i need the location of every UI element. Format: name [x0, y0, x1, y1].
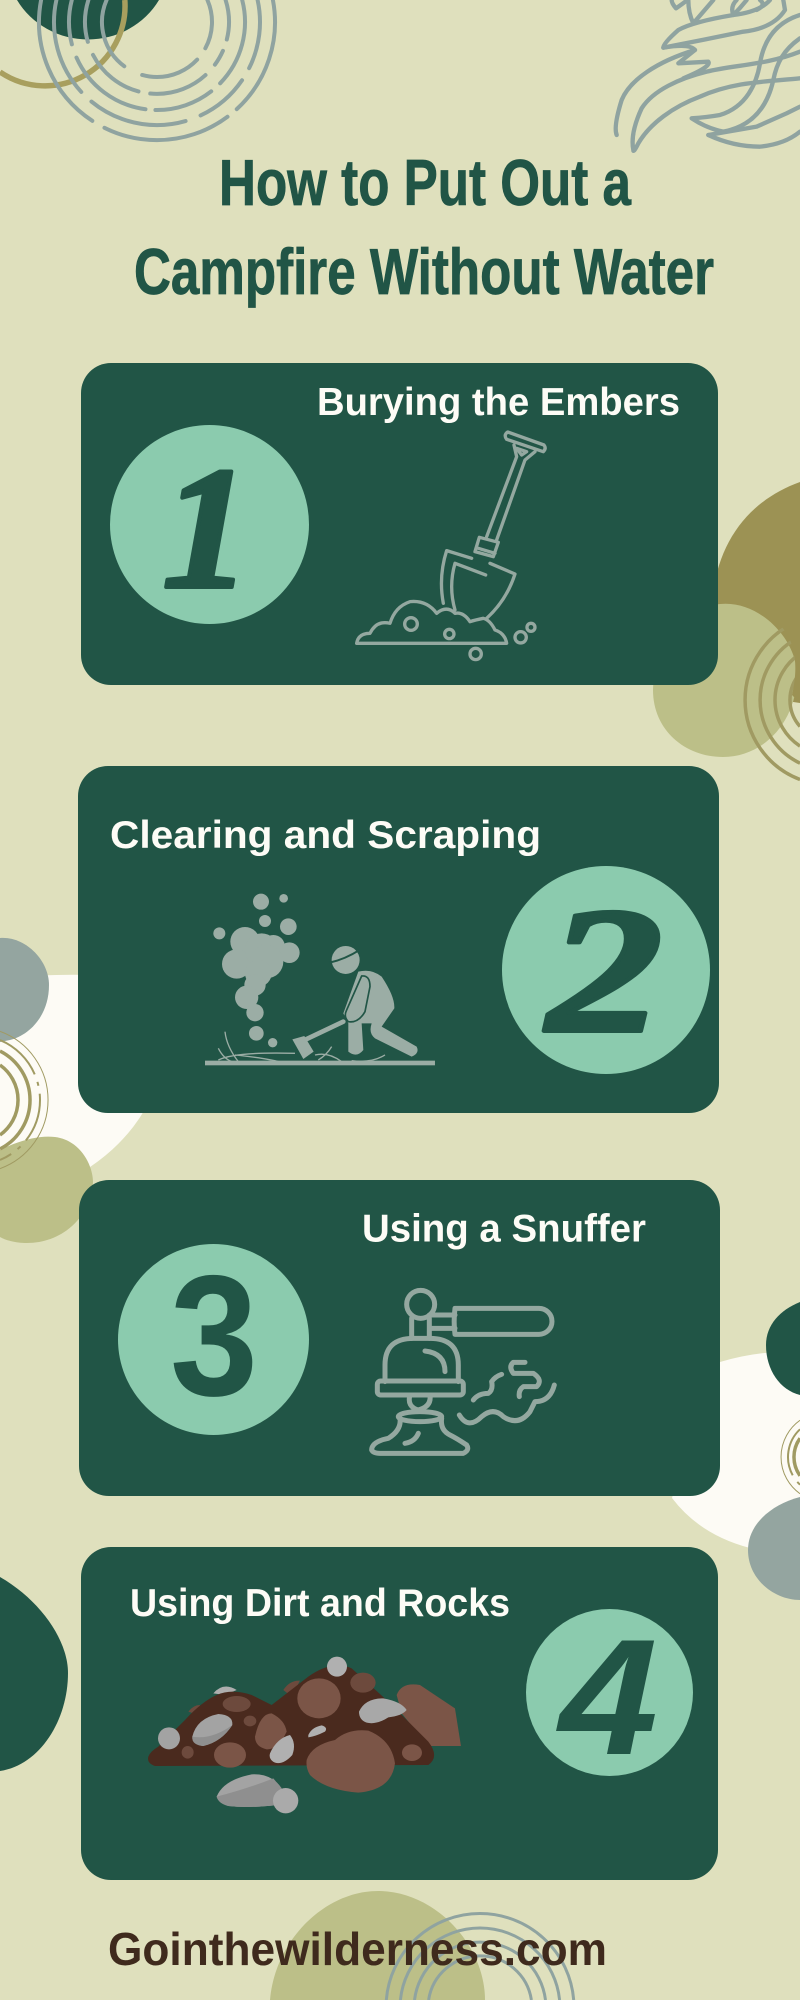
decoration: top-left circles [0, 0, 275, 140]
footer website: Gointhewilderness.com [108, 1923, 607, 1975]
heading: using dirt and rocks: Using Dirt and Rocks [130, 1582, 510, 1625]
number badge 1 [110, 425, 309, 625]
title: How to Put Out a [219, 146, 632, 219]
heading: burying the embers: Burying the Embers [317, 381, 680, 424]
panel: using a snuffer [79, 1180, 720, 1496]
number badge 3 [118, 1240, 309, 1435]
decoration: left lower dark blob [0, 1577, 68, 1771]
decoration: top-right wavy lines [616, 0, 800, 151]
number badge 3: 3 [170, 1240, 258, 1432]
decoration: right blobs and rings [653, 482, 800, 780]
icon: pile of dirt and rocks [148, 1657, 461, 1813]
icon: snuffer and smoke [372, 1290, 554, 1453]
icon: shovel in mound [357, 432, 545, 660]
heading: using a snuffer: Using a Snuffer [362, 1208, 646, 1250]
panel: clearing and scraping [78, 766, 719, 1113]
title [134, 146, 714, 308]
number badge 1: 1 [162, 431, 251, 625]
number badge 2 [502, 866, 710, 1074]
number badge 4 [526, 1605, 693, 1789]
decoration: left blobs and rings [0, 938, 150, 1243]
panel: using dirt and rocks [81, 1547, 718, 1880]
decoration: bottom blob and rings [270, 1891, 574, 2000]
heading: clearing and scraping: Clearing and Scraping [110, 814, 541, 857]
number badge 4: 4 [556, 1605, 658, 1789]
decoration: right lower blobs and rings [672, 1302, 800, 1600]
panel: burying the embers [81, 363, 718, 685]
number badge 2: 2 [543, 871, 663, 1070]
icon: person scraping ground near smoke [205, 894, 435, 1065]
